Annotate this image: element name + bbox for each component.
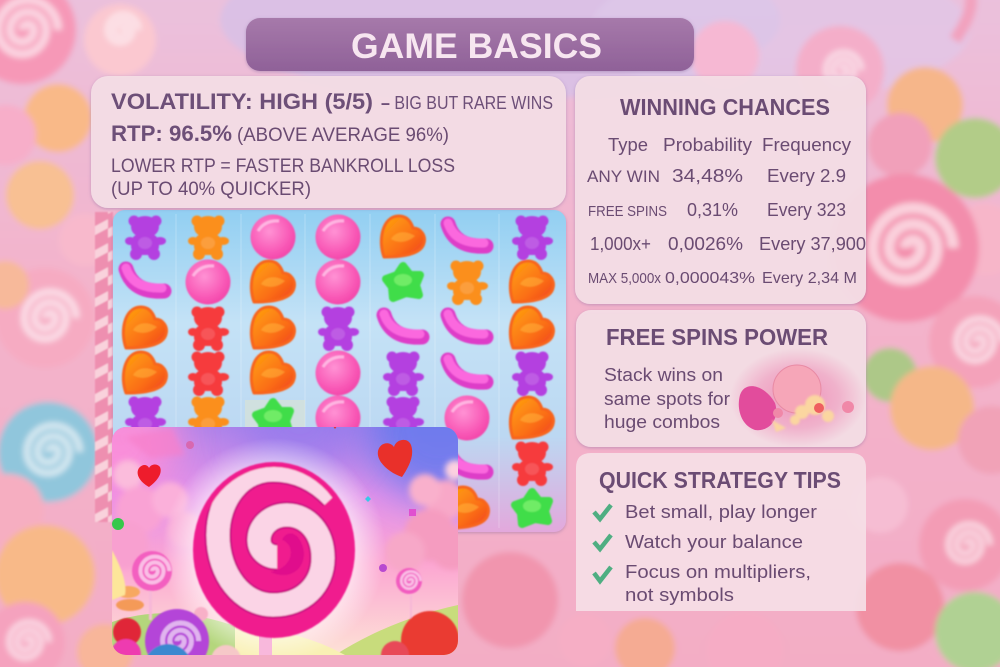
heading: QUICK STRATEGY TIPS (599, 467, 841, 493)
row: 1,000x+: 1,000x+ (590, 234, 651, 254)
table header (608, 134, 852, 155)
bankroll note: LOWER RTP = FASTER BANKROLL LOSS (111, 156, 455, 177)
description: huge combos (604, 411, 720, 432)
heading: WINNING CHANCES (620, 94, 830, 120)
row: free spins: 0,31% (687, 200, 738, 220)
panel: volatility and RTP (91, 76, 566, 208)
row: free spins (588, 200, 846, 220)
title text: GAME BASICS (351, 27, 602, 66)
description (604, 364, 730, 432)
lollipop stick (259, 636, 272, 655)
panel: free spins power (576, 310, 866, 448)
table header: Frequency (762, 134, 852, 155)
RTP line: RTP: 96.5% (111, 121, 232, 146)
icon: candy pile (730, 348, 866, 448)
row: max 5,000x: 0,000043% (665, 270, 755, 287)
row: free spins: Every 323 (767, 200, 846, 220)
image: giant lollipop scene (112, 427, 458, 655)
row: any win: ANY WIN (587, 168, 660, 186)
row: free spins: FREE SPINS (588, 203, 667, 220)
row: 1,000x+: Every 37,900 (759, 234, 866, 254)
main lollipop swirl (193, 462, 355, 638)
candy symbols (123, 214, 553, 528)
row: max 5,000x: MAX 5,000x (588, 270, 661, 287)
clouds (101, 428, 474, 572)
description: Stack wins on (604, 364, 723, 385)
volatility line: VOLATILITY: HIGH (5/5) (111, 89, 373, 114)
small lollipops and candies (112, 550, 458, 655)
volatility line: – BIG BUT RARE WINS (381, 93, 553, 113)
row: max 5,000x (588, 270, 857, 287)
row: 1,000x+ (590, 234, 866, 254)
row: any win: 34,48% (672, 166, 743, 186)
panel: game reel screenshot (113, 210, 566, 532)
bankroll note: (UP TO 40% QUICKER) (111, 179, 311, 200)
tip 3: not symbols (625, 584, 734, 605)
tip 3: Focus on multipliers, (625, 561, 811, 582)
volatility line (111, 89, 553, 114)
panel: quick strategy tips (576, 453, 866, 611)
row: any win (587, 166, 846, 186)
title banner (246, 18, 694, 71)
row: any win: Every 2.9 (767, 166, 846, 186)
table header: Probability (663, 134, 753, 155)
rope border of game board (95, 212, 113, 522)
RTP line (111, 121, 449, 146)
heading: FREE SPINS POWER (606, 324, 828, 350)
description: same spots for (604, 388, 730, 409)
RTP line: (ABOVE AVERAGE 96%) (237, 125, 449, 146)
panel: winning chances table (575, 76, 866, 304)
bankroll note (111, 156, 455, 200)
tip 1: Bet small, play longer (625, 501, 817, 522)
row: max 5,000x: Every 2,34 M (762, 270, 857, 287)
hills (112, 613, 240, 655)
tip 3 (594, 561, 811, 605)
tip 2: Watch your balance (625, 531, 803, 552)
hearts and sparkles (112, 423, 416, 572)
row: 1,000x+: 0,0026% (668, 234, 743, 254)
table header: Type (608, 134, 648, 155)
